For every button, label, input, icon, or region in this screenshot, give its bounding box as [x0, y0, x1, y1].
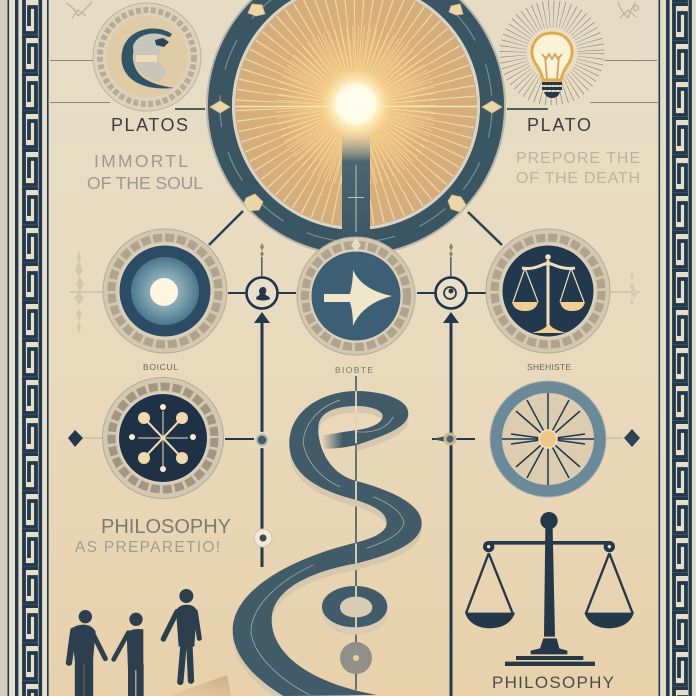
- top boss: [351, 238, 361, 252]
- left meander border: [0, 0, 49, 696]
- right meander border: [658, 0, 696, 696]
- text: philosophy as preparation: AS PREPARETIO!: [75, 539, 220, 556]
- road centre line: [353, 391, 358, 627]
- head glyph: [122, 28, 174, 89]
- fading tail: [322, 430, 357, 449]
- node: person: [246, 278, 278, 308]
- text: immortal of the soul: [87, 151, 203, 193]
- small ring road shadow: [322, 593, 387, 635]
- medallion: arrow: [297, 237, 415, 355]
- figure three: [163, 589, 199, 682]
- vertical arrow right: [443, 257, 459, 696]
- winding road: [233, 391, 422, 696]
- glass: [532, 33, 572, 80]
- bulb rays: [513, 14, 591, 92]
- medallion: Plato profile: [93, 3, 201, 111]
- diamond left: [68, 430, 83, 447]
- diagonal connector left: [209, 211, 243, 245]
- base: [542, 82, 562, 98]
- small ornaments above nodes: [260, 243, 453, 257]
- diamond right: [624, 429, 640, 447]
- faint corner flourish right: [618, 2, 638, 18]
- faint corner flourish left: [66, 2, 92, 18]
- figure one: [69, 610, 105, 696]
- golden disc: [235, 0, 477, 227]
- text: prepare the of the death: [516, 150, 640, 187]
- road surface: [233, 391, 422, 696]
- node: lower right small: [432, 432, 456, 446]
- connector line stubs from sun ring: [175, 108, 548, 110]
- text: prepare the of the death: PREPORE THE: [516, 150, 640, 167]
- lane markings: [251, 400, 404, 695]
- side ornament left: [74, 250, 84, 333]
- medallion: scales: [486, 229, 610, 353]
- light column: [342, 128, 370, 240]
- filament: [542, 54, 562, 79]
- medallion: soul: [103, 229, 227, 353]
- center vertical line: [355, 376, 357, 690]
- short sun rays: [301, 51, 411, 161]
- three human figures: [69, 589, 199, 696]
- heading: Platos: PLATOS: [111, 115, 188, 135]
- node: eye: [436, 278, 466, 308]
- medallion: network of nodes: [102, 378, 224, 498]
- heading: Plato: PLATO: [527, 115, 591, 135]
- sun glow: [318, 66, 394, 142]
- wheel of rays: [490, 381, 606, 497]
- text: prepare the of the death: OF THE DEATH: [516, 170, 640, 187]
- diagonal connector right: [468, 212, 502, 245]
- ring lane marks: [220, 0, 492, 242]
- grey end dot: [340, 642, 372, 674]
- paper curl: [168, 675, 231, 696]
- halo: [527, 28, 577, 78]
- node connectors: [225, 293, 486, 439]
- inner pale rim: [232, 0, 480, 230]
- side ornament right: [629, 272, 639, 307]
- figure two: [114, 613, 143, 696]
- long sun rays: [278, 28, 434, 184]
- text: immortal of the soul: IMMORTL: [94, 151, 188, 171]
- outer grey rim: [206, 0, 506, 256]
- text: immortal of the soul: OF THE SOUL: [87, 173, 203, 193]
- road side shadow: [233, 398, 422, 696]
- vertical arrow left: [254, 257, 270, 567]
- horizontal beam: [235, 106, 477, 108]
- label: philosophy: PHILOSOPHY: [492, 673, 614, 692]
- arrow star: [324, 270, 392, 326]
- node: lower left small: [254, 432, 270, 448]
- scale icon: [513, 260, 584, 329]
- node: white badge: [254, 529, 272, 547]
- small ring road: [322, 586, 387, 627]
- central sun circle: [206, 0, 506, 256]
- text: philosophy as preparation: [75, 516, 231, 556]
- ring ornaments: [210, 4, 502, 212]
- label: scales: SHEHISTE: [527, 362, 571, 372]
- large balance scale: [465, 512, 634, 666]
- text: philosophy as preparation: PHILOSOPHY: [101, 516, 231, 538]
- dark slate ring: [220, 0, 492, 242]
- icon: light bulb: [513, 14, 591, 98]
- label: arrow: BIOBTE: [335, 365, 373, 375]
- thin decorative connector lines: [50, 60, 658, 438]
- label: soul: BOICUL: [143, 362, 178, 372]
- column cross: [348, 165, 364, 232]
